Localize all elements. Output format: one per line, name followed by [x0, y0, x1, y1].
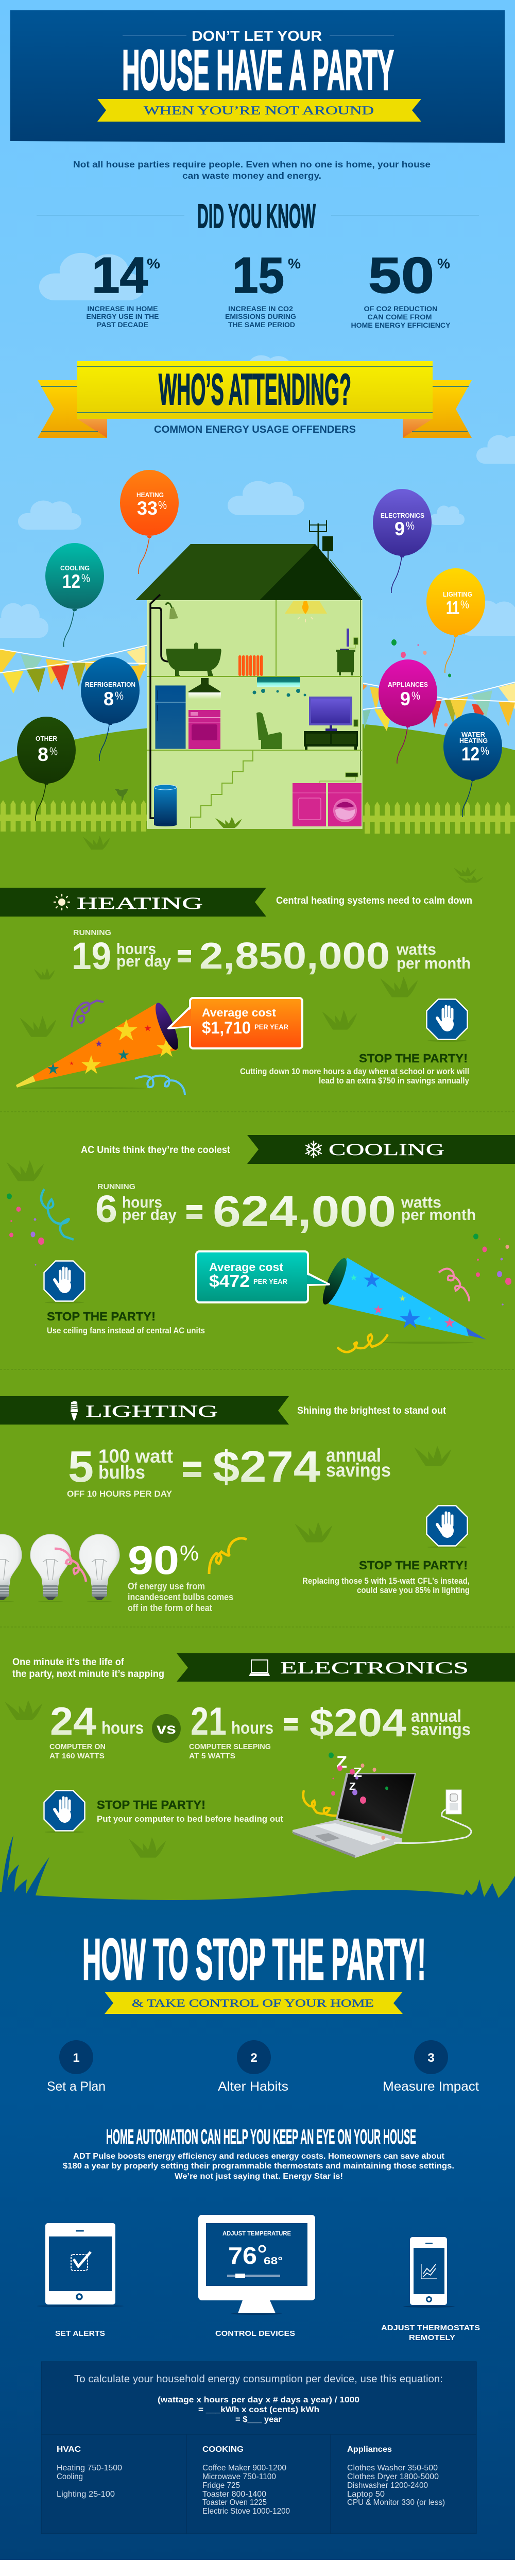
equation: = ___kWh x cost (cents) kWh [198, 2405, 319, 2414]
sleep letters: Z [349, 1781, 356, 1792]
device: monitor control devices: 76 [228, 2242, 257, 2269]
house illustration [135, 520, 363, 828]
stop the party text [97, 1798, 283, 1824]
device: monitor control devices [198, 2215, 315, 2338]
balloon: cooling: COOLING [60, 564, 90, 572]
streamer: yellow [303, 1790, 337, 1816]
intro text: can waste money and energy. [182, 171, 321, 181]
step 3: measure impact [383, 2040, 479, 2094]
balloon: electronics: 9 [394, 518, 405, 539]
subheading: common energy usage offenders: COMMON ENERGY USAGE OFFENDERS [154, 424, 356, 435]
panel: energy calculation [41, 2362, 476, 2534]
grass tufts [20, 876, 483, 1037]
step 1: set a plan: 1 [73, 2051, 80, 2065]
column: hvac [57, 2445, 122, 2499]
footer background [0, 2560, 515, 2576]
grass tufts [295, 1446, 451, 1543]
section: cooling [6, 1135, 515, 1352]
column: hvac: HVAC [57, 2445, 81, 2454]
equation: 24 hours vs 21 hours: annual [411, 1706, 461, 1725]
stat: 15 percent: INCREASE IN CO2 [228, 304, 293, 313]
column: hvac: Heating 750-1500 [57, 2464, 122, 2472]
equation: 24 hours vs 21 hours: 21 [191, 1700, 227, 1743]
clouds behind the house [0, 481, 515, 638]
balloon: cooling: % [81, 572, 90, 585]
lighting banner: LIGHTING [85, 1402, 218, 1421]
equation: five bulbs: annual [326, 1445, 381, 1466]
streamer: yellow [209, 1538, 247, 1574]
icon: checkbox [71, 2252, 91, 2270]
balloon: heating: HEATING [136, 491, 164, 499]
equation: 24 hours vs 21 hours: AT 5 WATTS [189, 1752, 235, 1760]
equation: running 19 hours: 2,850,000 [199, 936, 390, 977]
heating tagline: Central heating systems need to calm down [276, 895, 472, 906]
stop the party text: could save you 85% in lighting [357, 1586, 470, 1595]
stop the party text: Use ceiling fans instead of central AC units [47, 1326, 205, 1335]
stove [188, 710, 220, 749]
equation: running 19 hours: RUNNING [73, 928, 111, 937]
step 3: measure impact: Measure Impact [383, 2079, 479, 2094]
icon: cfl bulb [71, 1401, 78, 1420]
paragraph: adt pulse: $180 a year by properly setting their programmable thermostats and maintaining those settings. [63, 2162, 454, 2171]
balloon: other: 8 [38, 744, 48, 765]
cloud above ribbon [235, 355, 301, 386]
stat: 15 percent [225, 247, 301, 329]
cooling banner [247, 1135, 515, 1164]
heading: don't let your: DON’T LET YOUR [192, 28, 322, 44]
balloon: heating: 33 [137, 498, 158, 519]
equation: 24 hours vs 21 hours: COMPUTER ON [49, 1742, 106, 1751]
intro text: Not all house parties require people. Even when no one is home, your house [73, 159, 431, 170]
icon: sun [54, 894, 70, 910]
balloon: cooling: 12 [62, 571, 80, 592]
floors and walls [147, 600, 362, 828]
balloon: heating [120, 470, 179, 574]
balloon: refrigeration: % [115, 689, 124, 702]
confetti near lighting balloon [391, 639, 451, 726]
dryer [293, 783, 326, 826]
icon: incandescent bulbs [0, 1534, 119, 1602]
power strip [320, 773, 358, 783]
column: cooking: COOKING [202, 2445, 244, 2454]
house walls [147, 600, 362, 828]
balloon: appliances: 9 [400, 688, 410, 709]
90 percent fact: Of energy use from [128, 1581, 205, 1591]
callout: average cost: $472 [209, 1272, 250, 1291]
electronics banner [177, 1653, 515, 1682]
equation: running 6 hours: per month [401, 1206, 476, 1224]
grass tuft [454, 867, 476, 876]
icon: laptop [249, 1660, 270, 1676]
balloon: water heating: % [480, 744, 489, 757]
balloon: lighting: 11 [446, 597, 459, 618]
paragraph: adt pulse: We’re not just saying that. Energy Star is! [175, 2172, 343, 2181]
balloon: water heating [443, 713, 502, 817]
range hood [188, 678, 221, 699]
equation: running 19 hours: hours [116, 940, 156, 958]
equation: = $___ year [235, 2415, 282, 2424]
column: hvac: Cooling [57, 2472, 83, 2481]
device: phone adjust thermostats [381, 2237, 480, 2342]
equation: 24 hours vs 21 hours: savings [411, 1720, 471, 1739]
step 2: alter habits: 2 [250, 2051, 258, 2065]
equation: five bulbs: 5 [68, 1443, 94, 1492]
90 percent fact: % [180, 1541, 199, 1565]
balloon: lighting: % [460, 598, 469, 611]
stop the party text: STOP THE PARTY! [359, 1558, 468, 1572]
icon: stop hand [426, 1505, 468, 1548]
streamer: purple [72, 1001, 104, 1027]
equation: five bulbs: $274 [213, 1443, 320, 1492]
ground and hills [0, 724, 515, 1911]
stop the party text [240, 1052, 470, 1086]
paragraph: adt pulse: ADT Pulse boosts energy efficiency and reduces energy costs. Homeowners can save about [73, 2152, 444, 2161]
balloon: water heating: 12 [461, 743, 479, 765]
balloon: water heating: WATER [461, 731, 486, 738]
device: phone adjust thermostats: ADJUST THERMOSTATS [381, 2324, 480, 2332]
stat: 14 percent: PAST DECADE [97, 320, 148, 329]
column: cooking [202, 2445, 290, 2516]
section: electronics [5, 1653, 515, 1858]
column: appliances: CPU & Monitor 330 (or less) [347, 2498, 445, 2507]
column: appliances: Dishwasher 1200-2400 [347, 2481, 428, 2490]
stat: 15 percent: % [288, 256, 301, 272]
step 3: measure impact: 3 [427, 2051, 435, 2065]
equation: five bulbs [67, 1443, 391, 1499]
callout: average cost [168, 998, 302, 1048]
stop the party text [47, 1310, 205, 1335]
balloon: refrigeration: REFRIGERATION [85, 681, 135, 688]
balloon: electronics: ELECTRONICS [381, 512, 424, 519]
stop the party text: Put your computer to bed before heading out [97, 1814, 283, 1824]
balloon: appliances: % [411, 689, 420, 702]
callout: average cost: PER YEAR [253, 1277, 287, 1285]
streamer: pink [439, 1268, 469, 1301]
lighting tagline: Shining the brightest to stand out [297, 1405, 447, 1416]
equation: running 6 hours: watts [401, 1193, 441, 1211]
callout: average cost: Average cost [209, 1261, 284, 1274]
grass tuft [129, 1837, 166, 1858]
90 percent fact [128, 1537, 233, 1613]
stat: 50 percent: 50 [368, 247, 434, 303]
column: cooking: Fridge 725 [202, 2481, 240, 2490]
cooling tagline: AC Units think they’re the coolest [81, 1145, 231, 1156]
equation: running 19 hours: 19 [72, 935, 111, 977]
balloon: electronics [373, 489, 432, 593]
column: appliances [347, 2445, 445, 2507]
desk and computer [336, 629, 358, 675]
equation: running 6 hours: 6 [95, 1188, 117, 1230]
step 1: set a plan: Set a Plan [47, 2079, 106, 2094]
sky background [0, 0, 515, 773]
equation [74, 2374, 443, 2424]
callout: average cost: Average cost [202, 1006, 277, 1019]
device: tablet set alerts [37, 2223, 124, 2338]
icon: stop hand [426, 999, 468, 1042]
sleep letters [336, 1753, 362, 1792]
picket fence left [0, 800, 147, 832]
laptop confetti [329, 1753, 388, 1840]
header panel [10, 10, 505, 143]
yellow ribbon subtitle [97, 99, 421, 122]
equation: five bulbs: OFF 10 HOURS PER DAY [67, 1489, 173, 1499]
balloon: refrigeration [81, 657, 140, 761]
device: tablet set alerts: SET ALERTS [55, 2329, 105, 2338]
banner: who's attending [38, 361, 472, 438]
stop the party text: STOP THE PARTY! [359, 1052, 468, 1065]
illustration: sleeping laptop [293, 1753, 471, 1858]
callout: average cost: PER YEAR [254, 1023, 288, 1031]
party horn: cooling [318, 1256, 486, 1344]
equation: 24 hours vs 21 hours: vs [157, 1720, 176, 1737]
stat: 14 percent [87, 247, 160, 329]
callout: average cost [196, 1251, 329, 1302]
icon: snowflake [306, 1141, 321, 1158]
balloon: appliances: APPLIANCES [388, 681, 428, 688]
column: cooking: Coffee Maker 900-1200 [202, 2464, 286, 2472]
column: hvac: Lighting 25-100 [57, 2490, 115, 2499]
streamer: pink [55, 1549, 86, 1582]
balloon: appliances [379, 659, 437, 764]
stat: 15 percent: EMISSIONS DURING [225, 312, 296, 320]
grass tuft [6, 1160, 44, 1181]
column: appliances: Clothes Dryer 1800-5000 [347, 2472, 439, 2481]
equation: running 6 hours [95, 1182, 476, 1235]
washing machine [328, 783, 362, 826]
equation: running 19 hours [72, 928, 471, 977]
antenna [310, 520, 333, 560]
stat: 14 percent: INCREASE IN HOME [88, 304, 158, 313]
stat: 14 percent: 14 [92, 247, 148, 303]
column: appliances: Laptop 50 [347, 2490, 385, 2499]
stop the party text: STOP THE PARTY! [47, 1310, 156, 1323]
balloon: other [17, 717, 76, 821]
lighting banner [0, 1396, 289, 1425]
column: cooking: Electric Stove 1000-1200 [202, 2507, 290, 2516]
electronics tagline: One minute it’s the life of [12, 1657, 125, 1668]
heating banner: HEATING [77, 894, 203, 913]
bathtub [166, 642, 221, 676]
bunting right [363, 682, 515, 731]
balloon: lighting [426, 568, 485, 673]
balloon: other: OTHER [36, 735, 58, 742]
equation: five bulbs: savings [326, 1460, 391, 1481]
sleep letters: Z [336, 1753, 347, 1771]
streamer: blue [135, 1076, 185, 1095]
column: appliances: Appliances [347, 2445, 392, 2454]
90 percent fact: 90 [128, 1537, 179, 1583]
section: heating [0, 876, 483, 1095]
device: monitor control devices: ADJUST TEMPERATURE [222, 2231, 291, 2237]
confetti right [473, 1233, 511, 1306]
stat: 14 percent: ENERGY USE IN THE [87, 312, 159, 320]
stat: 50 percent: CAN COME FROM [368, 313, 432, 321]
shower [166, 603, 178, 619]
equation: 24 hours vs 21 hours: hours [231, 1718, 273, 1737]
party horn: heating [16, 1001, 182, 1089]
air conditioner [252, 677, 306, 697]
device: phone adjust thermostats: REMOTELY [409, 2333, 455, 2342]
icon: stop hand [44, 1791, 84, 1833]
equation: (wattage x hours per day x # days a year) / 1000 [158, 2396, 359, 2404]
cooling banner: COOLING [329, 1141, 444, 1159]
balloon: heating: % [158, 499, 167, 512]
equation: five bulbs: 100 watt [98, 1446, 173, 1467]
stat: 14 percent: % [147, 256, 160, 272]
radiator [238, 655, 263, 676]
90 percent fact: off in the form of heat [128, 1602, 212, 1613]
equation: running 6 hours: hours [122, 1193, 162, 1211]
step 2: alter habits [218, 2040, 288, 2094]
blue section background [0, 1835, 515, 2560]
device: monitor control devices: 68° [264, 2256, 283, 2267]
column: appliances: Clothes Washer 350-500 [347, 2464, 438, 2472]
step 2: alter habits: Alter Habits [218, 2079, 288, 2094]
balloon: refrigeration: 8 [104, 688, 114, 709]
stat: 50 percent: % [437, 256, 450, 272]
balloon: other: % [49, 745, 58, 758]
yellow ribbon subtitle: WHEN YOU’RE NOT AROUND [144, 104, 374, 117]
confetti and streamer left [7, 1189, 74, 1265]
ceiling lamp [285, 601, 327, 622]
heading: did you know: DID YOU KNOW [197, 197, 316, 235]
sleep letters: Z [353, 1765, 362, 1780]
armchair [256, 712, 282, 749]
column: cooking: Microwave 750-1100 [202, 2472, 276, 2481]
balloon: cooling [45, 543, 104, 647]
equation: 24 hours vs 21 hours: AT 160 WATTS [49, 1752, 105, 1760]
equation: running 19 hours: watts [396, 940, 436, 958]
refrigerator [155, 685, 186, 749]
paragraph: adt pulse [63, 2152, 454, 2181]
yellow ribbon: take control: & TAKE CONTROL OF YOUR HOME [132, 1997, 374, 2009]
stat: 15 percent: 15 [232, 247, 284, 303]
equation: running 6 hours: 624,000 [213, 1187, 396, 1235]
grass tuft [5, 1700, 42, 1720]
picket fence right [363, 802, 515, 834]
streamer: yellow [337, 1334, 388, 1352]
column: cooking: Toaster 800-1400 [202, 2490, 266, 2499]
equation: To calculate your household energy consumption per device, use this equation: [74, 2374, 443, 2385]
stat: 50 percent: OF CO2 REDUCTION [364, 304, 438, 313]
bird on fence [115, 789, 128, 800]
equation: running 6 hours: per day [122, 1206, 177, 1224]
icon: line chart [421, 2264, 437, 2279]
equation: 24 hours vs 21 hours: $204 [310, 1701, 406, 1745]
yellow ribbon: take control [105, 1992, 403, 2014]
section: lighting [0, 1396, 470, 1613]
stop the party text [302, 1558, 470, 1595]
equation: 24 hours vs 21 hours: 24 [50, 1700, 96, 1743]
electronics banner: ELECTRONICS [280, 1659, 469, 1677]
equation: 24 hours vs 21 hours [49, 1700, 471, 1760]
column: cooking: Toaster Oven 1225 [202, 2498, 267, 2507]
stat: 50 percent: HOME ENERGY EFFICIENCY [351, 321, 451, 329]
equation: 24 hours vs 21 hours: hours [101, 1718, 144, 1737]
cloud upper right [476, 435, 515, 464]
intro text [73, 159, 431, 181]
pipes [150, 595, 168, 818]
callout: average cost: $1,710 [202, 1018, 251, 1037]
water heater [154, 785, 177, 826]
stop the party text: Replacing those 5 with 15-watt CFL’s instead, [302, 1577, 470, 1586]
90 percent fact: incandescent bulbs comes [128, 1591, 233, 1602]
cloud beside statistics [39, 253, 144, 300]
heating banner [0, 888, 266, 917]
electronics tagline: the party, next minute it’s napping [12, 1669, 164, 1680]
electronics tagline [12, 1657, 164, 1680]
balloon: electronics: % [406, 519, 415, 532]
equation: running 19 hours: per day [116, 952, 171, 970]
roof [135, 544, 363, 775]
step 1: set a plan [47, 2040, 106, 2094]
stop the party text: STOP THE PARTY! [97, 1798, 205, 1811]
equation: running 6 hours: RUNNING [97, 1182, 135, 1191]
grass tuft [83, 836, 110, 850]
equation: 24 hours vs 21 hours: COMPUTER SLEEPING [189, 1742, 271, 1751]
grass in basement [215, 817, 242, 828]
stat: 50 percent [351, 247, 451, 329]
balloon: water heating: HEATING [459, 737, 488, 744]
television [304, 697, 358, 750]
balloon: lighting: LIGHTING [443, 590, 472, 598]
device: monitor control devices: CONTROL DEVICES [215, 2329, 295, 2338]
stop the party text: Cutting down 10 more hours a day when at school or work will [240, 1067, 469, 1076]
equation: running 19 hours: per month [397, 954, 471, 972]
bunting left [0, 645, 148, 693]
outlet [446, 1790, 461, 1814]
icon: stop hand [44, 1261, 84, 1303]
equation: five bulbs: bulbs [98, 1462, 145, 1483]
stop the party text: lead to an extra $750 in savings annually [319, 1076, 470, 1086]
stat: 15 percent: THE SAME PERIOD [228, 320, 295, 329]
